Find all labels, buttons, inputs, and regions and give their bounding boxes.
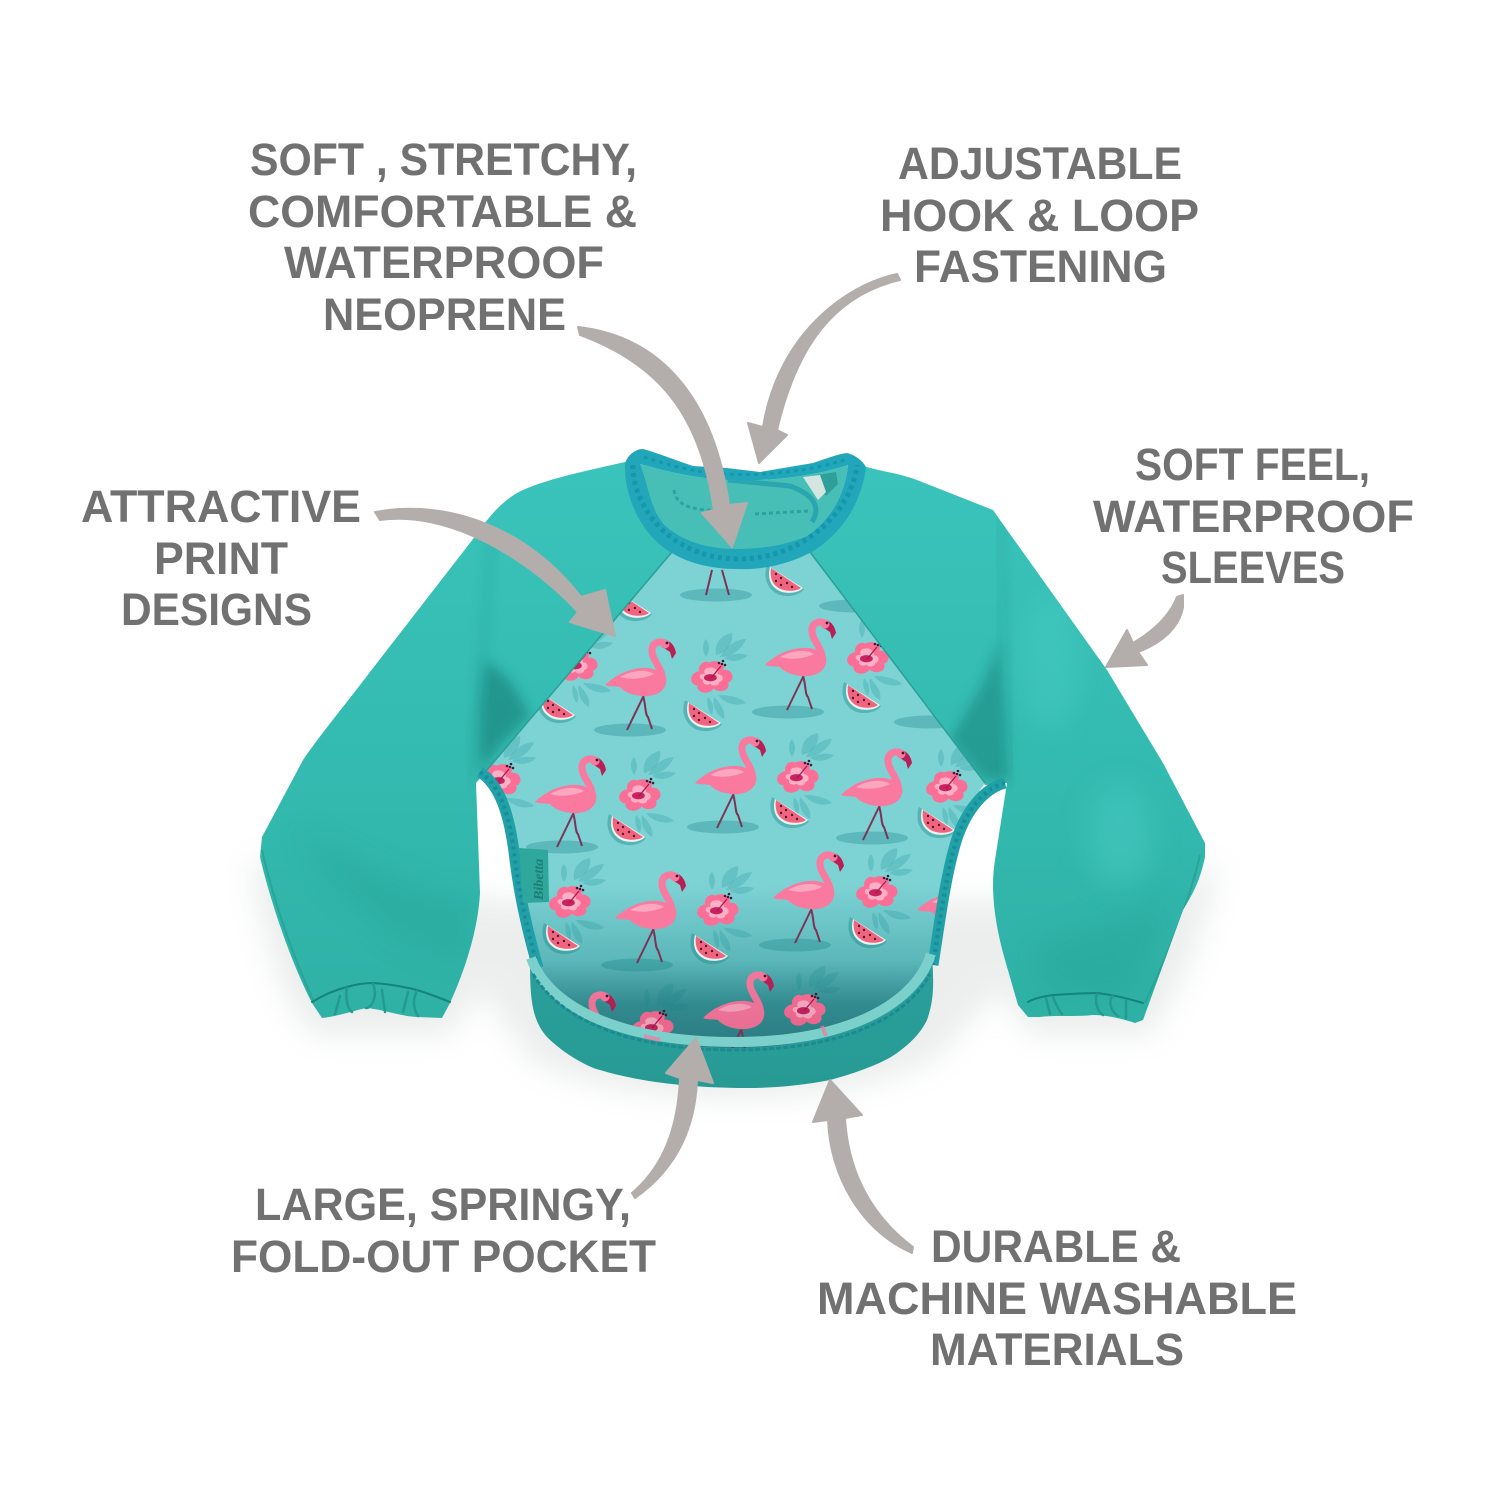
soft drop shadow under bib: [250, 860, 1218, 1099]
arrow: pocket: [632, 1038, 713, 1198]
label: pocket: [231, 1179, 656, 1282]
label: durable materials: [817, 1221, 1297, 1375]
arrow: hook and loop: [748, 274, 900, 463]
arrow: print designs: [375, 509, 615, 636]
collar binding: [625, 449, 866, 569]
label: adjustable fastening: FASTENING: [914, 241, 1167, 292]
label: adjustable fastening: [880, 138, 1199, 292]
pattern row 4: [588, 966, 840, 1048]
brand tag: [519, 848, 549, 903]
background shading toward pocket: [528, 903, 935, 1048]
underarm binding right: [933, 783, 1005, 965]
arrow: sleeves: [1106, 595, 1183, 667]
left cuff: [312, 983, 450, 1016]
label: adjustable fastening: HOOK & LOOP: [880, 190, 1199, 241]
left sleeve: [260, 462, 680, 1018]
pattern row 2: [479, 733, 983, 854]
brand tag: Bibetta: [532, 859, 547, 901]
label: attractive print: DESIGNS: [121, 584, 312, 635]
label: pocket: LARGE, SPRINGY,: [255, 1179, 631, 1230]
label: soft feel sleeves: WATERPROOF: [1093, 491, 1414, 542]
label: attractive print: [81, 481, 361, 635]
bib garment: [260, 449, 1205, 1088]
neck interior: [640, 464, 848, 552]
pattern row 0: [620, 566, 855, 622]
label: soft feel sleeves: [1093, 439, 1414, 593]
label: soft feel sleeves: SOFT FEEL,: [1135, 439, 1370, 490]
label: soft, stretchy neoprene: COMFORTABLE &: [248, 186, 637, 237]
label: durable materials: MACHINE WASHABLE: [817, 1273, 1297, 1324]
front printed panel: [486, 552, 986, 1048]
label: attractive print: ATTRACTIVE: [81, 481, 361, 532]
arrow: durable materials: [813, 1080, 913, 1253]
label: adjustable fastening: ADJUSTABLE: [898, 138, 1182, 189]
label: durable materials: DURABLE &: [931, 1221, 1181, 1272]
label: pocket: FOLD-OUT POCKET: [231, 1231, 656, 1282]
pocket shading over print: [576, 992, 884, 1048]
panel seams: [487, 552, 985, 783]
pattern row 3: [542, 848, 938, 972]
label: soft, stretchy neoprene: WATERPROOF: [284, 237, 604, 288]
arrow: neoprene: [578, 327, 747, 547]
label: durable materials: MATERIALS: [930, 1324, 1184, 1375]
label: attractive print: PRINT: [154, 533, 288, 584]
pattern row 1: [537, 614, 966, 736]
label: soft, stretchy neoprene: [248, 134, 637, 340]
right sleeve: [806, 462, 1205, 1023]
label: soft feel sleeves: SLEEVES: [1161, 542, 1345, 593]
fold-out pocket: [530, 954, 933, 1088]
right cuff: [1028, 993, 1143, 1018]
label: soft, stretchy neoprene: NEOPRENE: [323, 289, 566, 340]
label: soft, stretchy neoprene: SOFT , STRETCHY,: [250, 134, 637, 185]
underarm binding left: [480, 772, 538, 968]
